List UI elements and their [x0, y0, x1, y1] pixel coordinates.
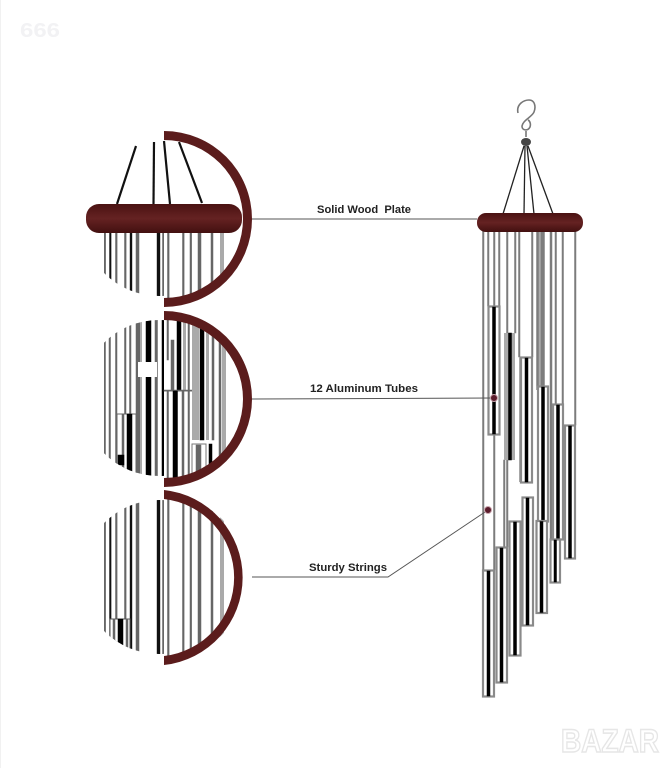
dot: [490, 394, 498, 402]
hanging strings: [503, 146, 553, 214]
back tubes: [488, 306, 563, 540]
label: Sturdy Strings: [309, 562, 387, 574]
short tube: [110, 618, 130, 648]
label: 12 Aluminum Tubes: [310, 383, 418, 395]
leader line: [252, 398, 494, 399]
white gap: [138, 362, 157, 377]
hook: [518, 100, 535, 137]
watermark: 666: 666: [20, 20, 60, 42]
leader line: [252, 218, 477, 220]
ring: [164, 311, 252, 487]
tube strings: [482, 230, 576, 570]
inset: solid wood plate detail: [86, 131, 252, 310]
dot: [484, 506, 492, 514]
label: Solid Wood Plate: [317, 204, 411, 216]
inset: aluminum tubes detail: [104, 310, 252, 495]
callout: 12 aluminum tubes: [252, 383, 498, 402]
ring: [164, 131, 252, 307]
leader line: [252, 510, 488, 577]
inset: sturdy strings detail: [104, 490, 243, 670]
watermark: Bazar logo: BAZAR: [561, 723, 659, 759]
callout: sturdy strings: [252, 506, 492, 577]
wood plate: [477, 213, 583, 232]
ring: [164, 490, 243, 665]
main wind chime: [477, 100, 583, 696]
front tubes: [483, 426, 575, 696]
strings: [117, 141, 202, 204]
hook bead: [521, 138, 531, 146]
wood plate: [86, 204, 242, 233]
